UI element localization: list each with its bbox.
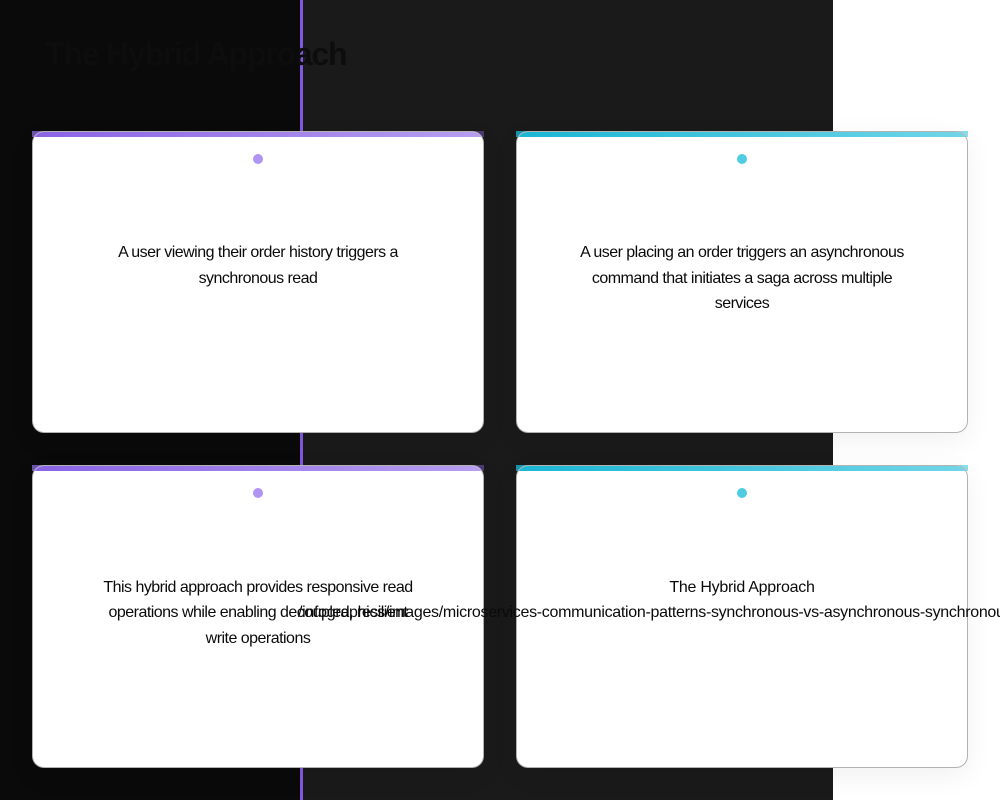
text block: image caption: The Hybrid Approach bbox=[669, 579, 815, 596]
panel: synchronous read card bbox=[32, 131, 484, 435]
panel: asynchronous command card bbox=[516, 131, 968, 438]
text block: synchronous read: A user viewing their order history triggers a bbox=[118, 244, 398, 261]
text block: hybrid summary: operations while enabling decoupled, resilient bbox=[109, 604, 407, 621]
icon: cyan dot bbox=[737, 488, 747, 498]
text block: hybrid summary bbox=[103, 579, 413, 647]
text block: asynchronous command: command that initiates a saga across multiple bbox=[592, 270, 892, 287]
icon: cyan dot bbox=[737, 154, 747, 164]
panel: image placeholder card bbox=[516, 465, 968, 772]
purple vertical line bbox=[300, 0, 303, 800]
text block: asynchronous command: services bbox=[715, 295, 769, 312]
icon: purple dot bbox=[253, 154, 263, 164]
panel: hybrid summary card bbox=[32, 465, 484, 770]
icon: purple dot bbox=[253, 488, 263, 498]
background: black left band bbox=[0, 0, 300, 800]
text block: synchronous read bbox=[118, 244, 398, 287]
text block: synchronous read: synchronous read bbox=[199, 270, 317, 287]
text block: hybrid summary: write operations bbox=[206, 630, 310, 647]
text block: hybrid summary: This hybrid approach provides responsive read bbox=[103, 579, 413, 596]
text block: asynchronous command: A user placing an order triggers an asynchronous bbox=[580, 244, 904, 261]
background: charcoal centre band bbox=[303, 0, 833, 800]
title: The Hybrid Approach bbox=[45, 36, 346, 72]
text block: asynchronous command bbox=[580, 244, 904, 312]
